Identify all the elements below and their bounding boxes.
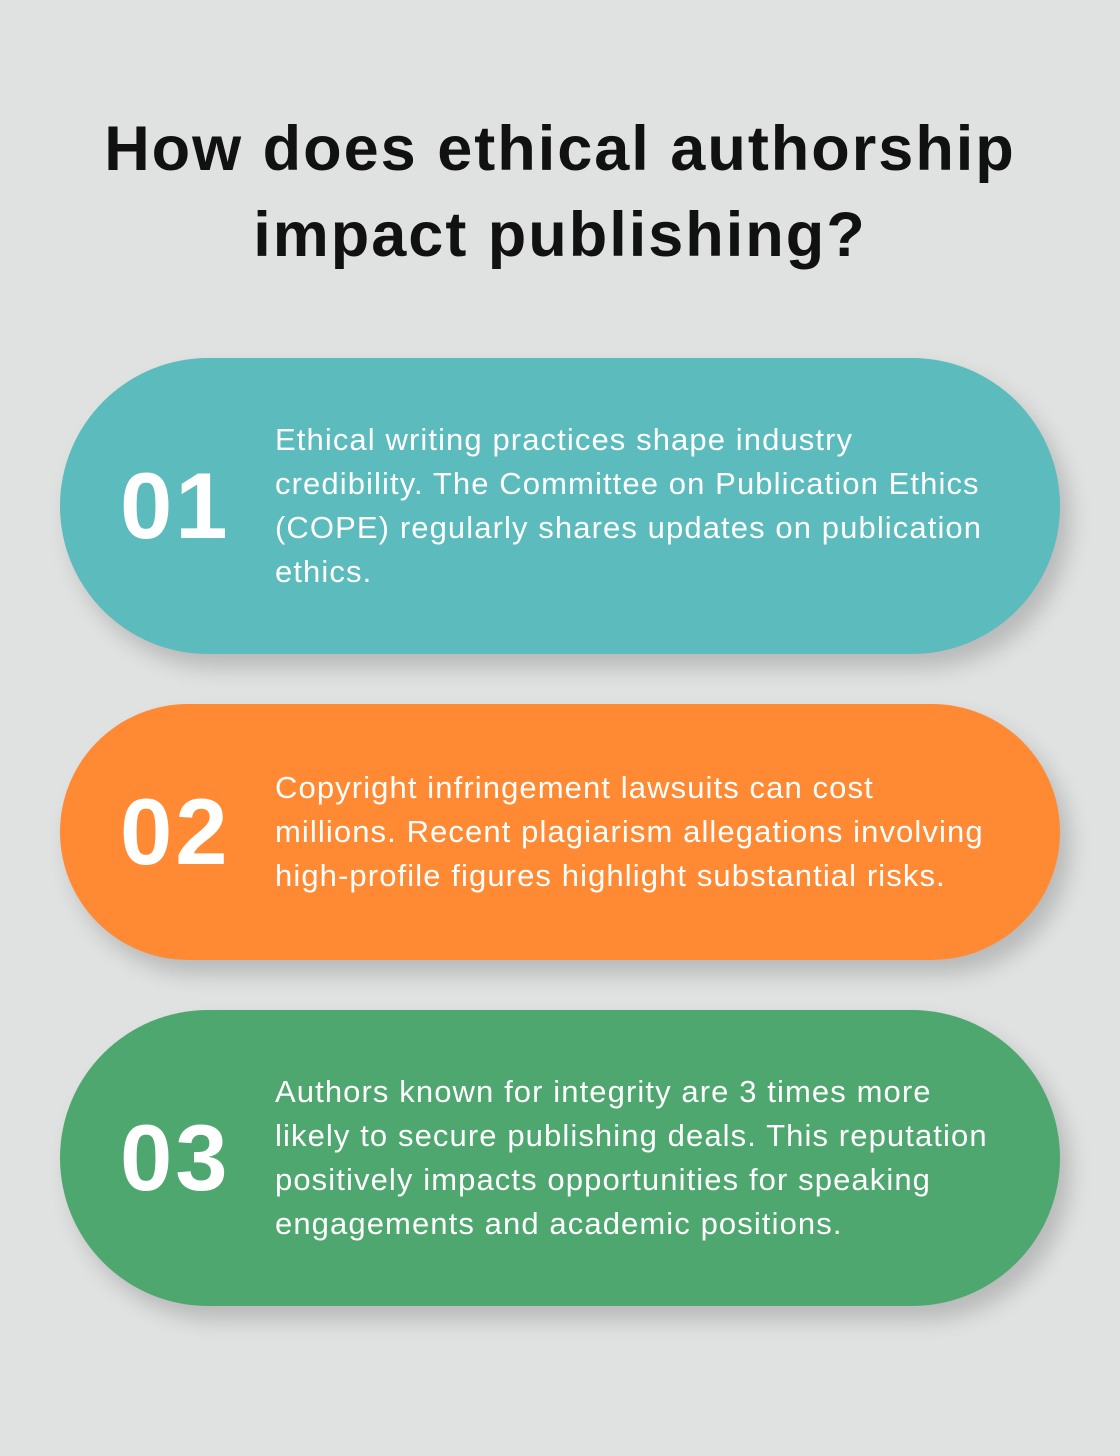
title [104, 114, 1016, 270]
text 03: Authors known for integrity are 3 times more [275, 1074, 932, 1109]
number 01: 01 [120, 453, 231, 558]
title: impact publishing? [253, 200, 867, 270]
text 01 [275, 422, 982, 589]
text 02: Copyright infringement lawsuits can cost [275, 770, 874, 805]
text 01: credibility. The Committee on Publication Ethics [275, 466, 980, 501]
text 03: positively impacts opportunities for speaking [275, 1162, 931, 1197]
number 02: 02 [120, 779, 231, 884]
text 03: engagements and academic positions. [275, 1206, 843, 1241]
text 02 [275, 770, 984, 893]
title: How does ethical authorship [104, 114, 1016, 184]
text 03: likely to secure publishing deals. This reputation [275, 1118, 988, 1153]
text 03 [275, 1074, 988, 1241]
text 02: high-profile figures highlight substantial risks. [275, 858, 946, 893]
panel: 01 [60, 358, 1060, 654]
text 01: ethics. [275, 554, 372, 589]
text 01: (COPE) regularly shares updates on publication [275, 510, 982, 545]
panel: 02 [60, 704, 1060, 960]
panel: 03 [60, 1010, 1060, 1306]
number 03: 03 [120, 1105, 231, 1210]
text 01: Ethical writing practices shape industry [275, 422, 853, 457]
text 02: millions. Recent plagiarism allegations involving [275, 814, 984, 849]
